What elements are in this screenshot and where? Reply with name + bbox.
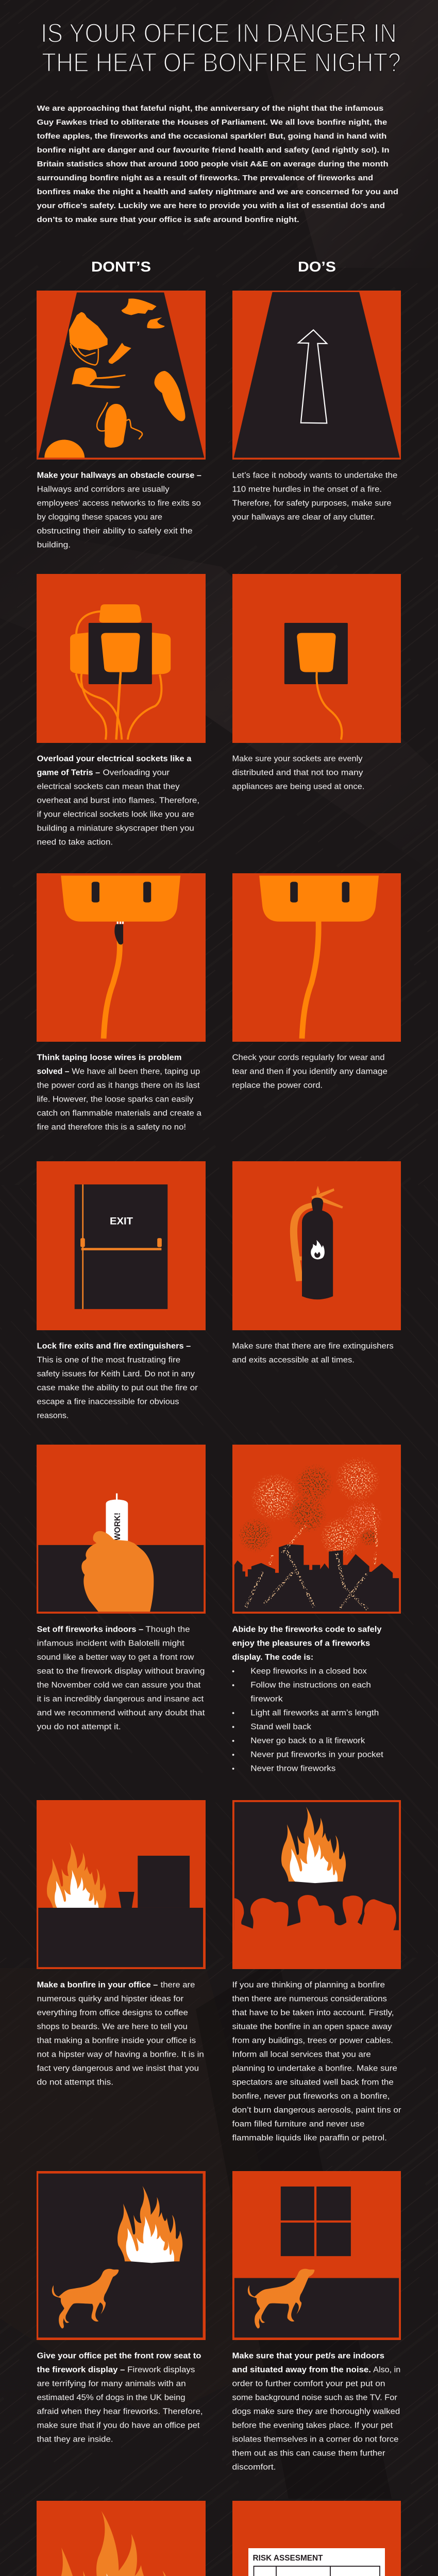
text: cords don't: We have all been there, taping up [72,1067,200,1076]
text: pets do: some background noise such as the TV. For [232,2394,397,2402]
text: cords don't: Think taping loose wires is problem [37,1053,181,1062]
panel: bonfire with spectators [232,1800,401,1969]
text: pets do: before the evening takes place. If your pet [232,2421,393,2430]
text: sockets do [232,754,365,791]
text: fireworks don't: sound like a better way to get a front row [37,1653,194,1662]
text: bonfire do: spectators are situated well back from the [232,2078,394,2087]
icon: flame [47,1842,106,1912]
text: pets don't [37,2351,203,2444]
text: sockets don't: need to take action. [37,838,113,847]
text: bonfire do: that have to be taken into account. Firstly, [232,2008,394,2018]
text: bonfire don't: numerous quirky and hipster ideas for [37,1995,183,2003]
text: pets don't: afraid when they hear fireworks. Therefore, [37,2407,203,2416]
text: fireworks don't: seat to the firework display without braving [37,1667,205,1675]
text: bonfire do: then there are numerous considerations [232,1995,387,2003]
text: bonfire do: from any buildings, trees or power cables. [232,2036,393,2045]
text: sockets do: appliances are being used at once. [232,782,365,791]
text: fireworks don't: you do not attempt it. [37,1723,121,1731]
form title: RISK ASSESMENT [252,2554,323,2563]
intro text block: We are approaching that fateful night, the anniversary of the night that the infamous [37,104,383,113]
text: sockets don't [37,754,199,847]
text: pets do: Also, in [373,2366,400,2374]
icon: dog [248,2269,314,2329]
text: bonfire do: foam filled furniture and never use [232,2120,365,2129]
heading: do's: DO’S [298,259,336,275]
text: cords don't: catch on flammable materials and create a [37,1109,201,1118]
text: exits don't: This is one of the most frustrating fire [37,1356,180,1364]
text: exits do: Make sure that there are fire extinguishers [232,1342,394,1351]
text: pets don't: estimated 45% of dogs in the UK being [37,2394,185,2402]
text: cords do [232,1053,388,1090]
text: sockets don't: Overloading your [103,769,170,777]
panel: dog facing bonfire [37,2171,206,2340]
text: pets don't: are terrifying for many animals with an [37,2379,186,2388]
text: sockets don't: building a miniature skyscraper then you [37,824,194,833]
icon: flame [117,2186,182,2263]
intro text block: Guy Fawkes tried to obliterate the Houses of Parliament. We all love bonfire night, the [37,118,387,127]
intro text block: don’ts to make sure that your office is safe around bonfire night. [37,215,299,224]
text: pets don't: that they are inside. [37,2435,113,2444]
text: sockets don't: overheat and burst into flames. Therefore, [37,796,199,805]
panel: burning risk assessment [37,2501,206,2576]
text: hallways don't: building. [37,541,71,549]
panel: fire extinguisher [232,1161,401,1330]
text: bonfire do: flammable liquids like paraffin or petrol. [232,2134,387,2142]
text: bonfire don't: there are [161,1980,195,1990]
title [41,19,401,78]
text: pets don't: make sure that if you do have an office pet [37,2421,200,2430]
text: cords do: tear and then if you identify any damage [232,1067,388,1076]
text: bonfire do [232,1980,401,2142]
fireworks code list: Keep fireworks in a closed box [250,1667,367,1675]
text: pets don't: Give your office pet the front row seat to [37,2351,201,2361]
text: sockets don't: if your electrical sockets look like you are [37,810,194,819]
text: cords don't [37,1053,201,1131]
text: hallways don't: Hallways and corridors are usually [37,485,170,494]
text: fireworks code: Abide by the fireworks code to safely [232,1625,382,1634]
fireworks code list: firework [250,1695,283,1703]
text: exits don't: case make the ability to put out the fire or [37,1384,198,1392]
text: pets do: discomfort. [232,2463,276,2472]
fireworks code list: Never put fireworks in your pocket [250,1751,384,1759]
text: fireworks don't: it is an incredibly dangerous and insane act [37,1695,204,1703]
text: sockets do: distributed and that not too many [232,769,363,777]
text: bonfire don't: shops to beards. We are here to tell you [37,2023,188,2031]
text: pets do: isolates themselves in a corner do not force [232,2435,399,2444]
panel: fireworks over skyline [232,1445,401,1614]
fireworks bursts [238,1456,383,1558]
text: fireworks code: enjoy the pleasures of a fireworks [232,1639,370,1648]
text: fireworks code: display. The code is: [232,1653,313,1662]
text: cords don't: life. However, the loose sparks can easily [37,1095,193,1104]
text: exits don't: reasons. [37,1412,69,1420]
text: exits don't: escape a fire inaccessible for obvious [37,1397,179,1406]
text: pets don't: Firework displays [127,2366,195,2374]
text: bonfire do: Inform all local services that you are [232,2050,371,2059]
text: fireworks don't: Set off fireworks indoors – [37,1625,143,1634]
text: hallways don't: Make your hallways an obstacle course – [37,471,201,480]
icon: white arrow [298,330,327,423]
text: pets do: dogs make sure they are thoroughly walked [232,2407,400,2416]
text: hallways do: Let’s face it nobody wants to undertake the [232,471,397,480]
form table [254,2566,380,2576]
text: cords do: replace the power cord. [232,1081,323,1090]
text: fireworks don't: the November cold we can assure you that [37,1681,201,1690]
fireworks code list: Follow the instructions on each [250,1681,371,1690]
text: pets do [232,2351,400,2472]
text: cords don't: the power cord as it hangs there on its last [37,1081,200,1090]
fireworks code list: Never go back to a lit firework [250,1736,365,1745]
text: fireworks code [232,1625,384,1773]
text: hallways don't: employees’ access networks to fire exits so [37,499,201,508]
text: exits do [232,1342,394,1364]
intro text block: bonfire night are danger and our favourite friend health and safety (and rightly so!). In [37,146,390,155]
intro text block: bonfires make the night a health and safety nightmare and we are concerned for you and [37,188,398,196]
exit sign: EXIT [110,1216,133,1227]
text: sockets don't: Overload your electrical sockets like a [37,754,192,764]
text: exits don't [37,1342,198,1420]
intro text block [37,104,398,224]
intro text block: Britain statistics show that around 1000 people visit A&E on average during the month [37,160,389,168]
firework label: WORK! [113,1513,122,1540]
icon: dog [52,2269,119,2329]
panel: fire exit door [37,1161,206,1330]
text: pets do: order to further comfort your pet put on [232,2379,385,2388]
text: cords don't: solved – [37,1067,70,1076]
fireworks code list [232,1667,384,1773]
text: fireworks don't: Though the [145,1625,190,1634]
panel: clear hallway with arrow [232,291,401,460]
panel: healthy power cord [232,873,401,1042]
panel: taped power cord [37,873,206,1042]
text: exits don't: Lock fire exits and fire extinguishers – [37,1342,191,1351]
text: bonfire don't: everything from office designs to coffee [37,2008,188,2018]
text: bonfire don't: not a hipster way of having a bonfire. It is in [37,2050,204,2059]
text: hallways do: Therefore, for safety purposes, make sure [232,499,392,508]
text: fireworks don't [37,1625,205,1731]
panel: overloaded socket [37,574,206,743]
panel: firework held indoors [37,1445,206,1614]
heading: don'ts: DONT’S [91,259,151,275]
title: IS YOUR OFFICE IN DANGER IN [41,19,397,48]
text: sockets do: Make sure your sockets are evenly [232,754,363,764]
text: sockets don't: electrical sockets can mean that they [37,782,180,791]
text: hallways don't: obstructing their ability to safely exit the [37,527,193,536]
text: hallways don't: by clogging these spaces you are [37,513,162,521]
text: bonfire do: bonfire, never put fireworks on a bonfire, [232,2092,390,2101]
text: pets do: Make sure that your pet/s are indoors [232,2351,384,2361]
window [281,2187,351,2256]
firework trails [246,1504,377,1609]
panel: single plug socket [232,574,401,743]
text: exits do: and exits accessible at all times. [232,1356,355,1364]
title: THE HEAT OF BONFIRE NIGHT? [42,48,401,78]
intro text block: toffee apples, the fireworks and the occasional sparkler! But, going hand in hand with [37,132,386,141]
text: bonfire do: don’t burn dangerous aerosols, paint tins or [232,2106,401,2114]
panel: bonfire on office desk [37,1800,206,1969]
text: cords do: Check your cords regularly for wear and [232,1053,384,1062]
intro text block: surrounding bonfire night as a result of fireworks. The prevalence of fireworks and [37,174,373,182]
text: pets do: and situated away from the noise. [232,2366,371,2374]
text: sockets don't: game of Tetris – [37,769,100,777]
text: bonfire don't: that making a bonfire inside your office is [37,2036,196,2045]
text: bonfire don't: Make a bonfire in your office – [37,1980,158,1990]
text: pets don't: the firework display – [37,2366,125,2374]
fireworks code list: Never throw fireworks [250,1764,336,1773]
text: hallways don't [37,471,201,549]
panel: risk assessment form [232,2501,401,2576]
text: exits don't: safety issues for Keith Lard. Do not in any [37,1369,195,1379]
fireworks code list: Stand well back [250,1723,311,1731]
text: bonfire don't [37,1980,204,2087]
text: bonfire don't: fact very dangerous and we insist that you [37,2064,199,2073]
text: hallways do: 110 metre hurdles in the onset of a fire. [232,485,382,494]
text: cords don't: fire and therefore this is a safety no no! [37,1123,186,1131]
text: bonfire do: planning to undertake a bonfire. Make sure [232,2064,397,2073]
intro text block: your office’s safety. Luckily we are here to provide you with a list of essential do’s and [37,201,385,210]
panel: dog indoors with window [232,2171,401,2340]
text: fireworks don't: infamous incident with Balotelli might [37,1639,185,1648]
text: bonfire don't: do not attempt this. [37,2078,113,2087]
text: fireworks don't: and we recommend without any doubt that [37,1708,205,1718]
text: bonfire do: If you are thinking of planning a bonfire [232,1980,385,1990]
fireworks code list: Light all fireworks at arm’s length [250,1708,379,1718]
panel: hallway obstacles [37,291,206,460]
text: hallways do: your hallways are clear of any clutter. [232,513,375,521]
text: hallways do [232,471,397,521]
text: bonfire do: situate the bonfire in an open space away [232,2023,392,2031]
icon: flame [281,1807,346,1883]
icon: large flame with document [61,2511,166,2576]
text: pets do: them out as this can cause them further [232,2449,385,2458]
